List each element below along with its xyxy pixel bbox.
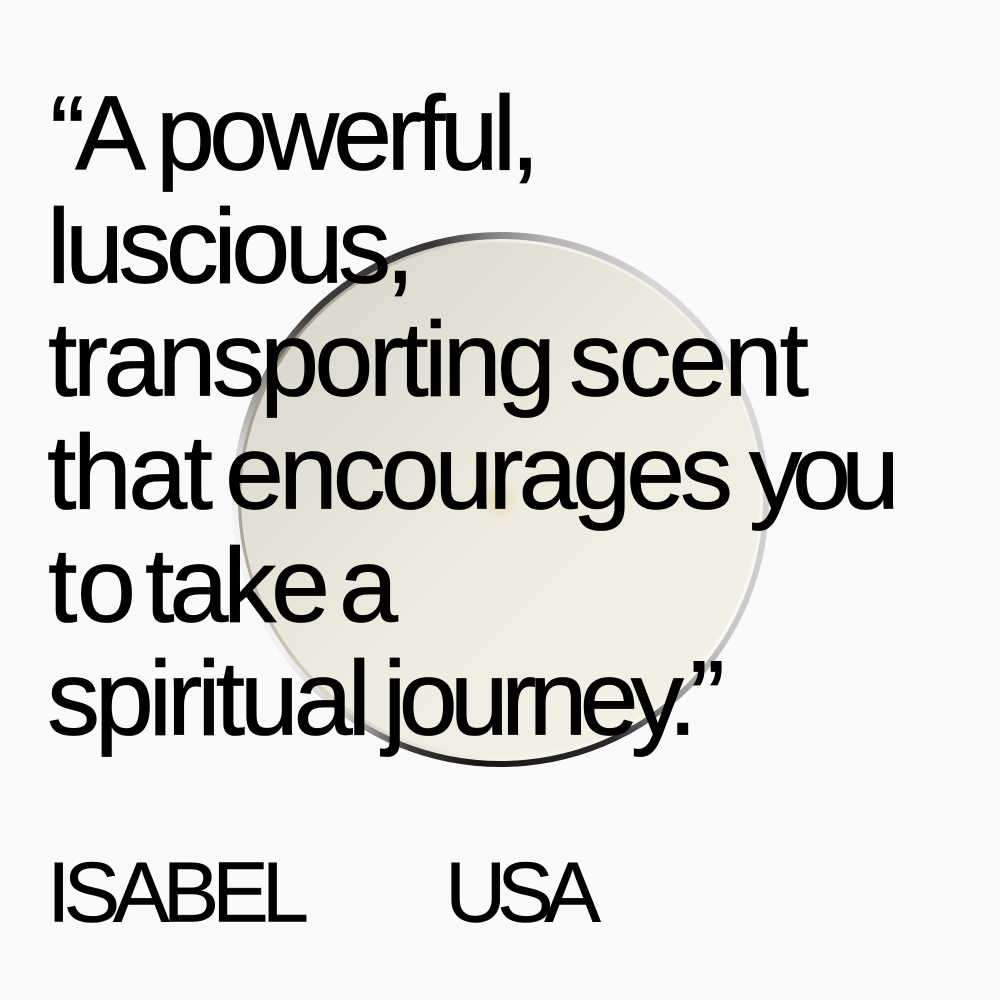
- candle wick glow: [479, 480, 519, 520]
- quote text: [47, 74, 900, 758]
- candle inner lip: [238, 239, 763, 761]
- quote text: powerful,: [156, 74, 540, 192]
- quote text: transporting: [48, 300, 556, 418]
- quote text: take: [145, 526, 330, 644]
- quote text: luscious,: [47, 188, 415, 306]
- quote text: that: [47, 414, 213, 532]
- attribution: name: ISABEL: [47, 846, 309, 940]
- candle wax surface: [241, 242, 760, 757]
- quote text: a: [339, 526, 398, 644]
- quote text: you: [749, 414, 900, 532]
- image: candle seen from above: [232, 232, 769, 767]
- quote text: spiritual: [47, 640, 371, 758]
- quote text: “A: [50, 74, 146, 192]
- quote text: encourages: [225, 414, 733, 532]
- attribution: country: USA: [445, 846, 601, 940]
- quote text: journey.”: [380, 640, 725, 758]
- quote text: scent: [569, 300, 809, 418]
- quote text: to: [48, 526, 136, 644]
- candle tin metal ring: [232, 232, 769, 767]
